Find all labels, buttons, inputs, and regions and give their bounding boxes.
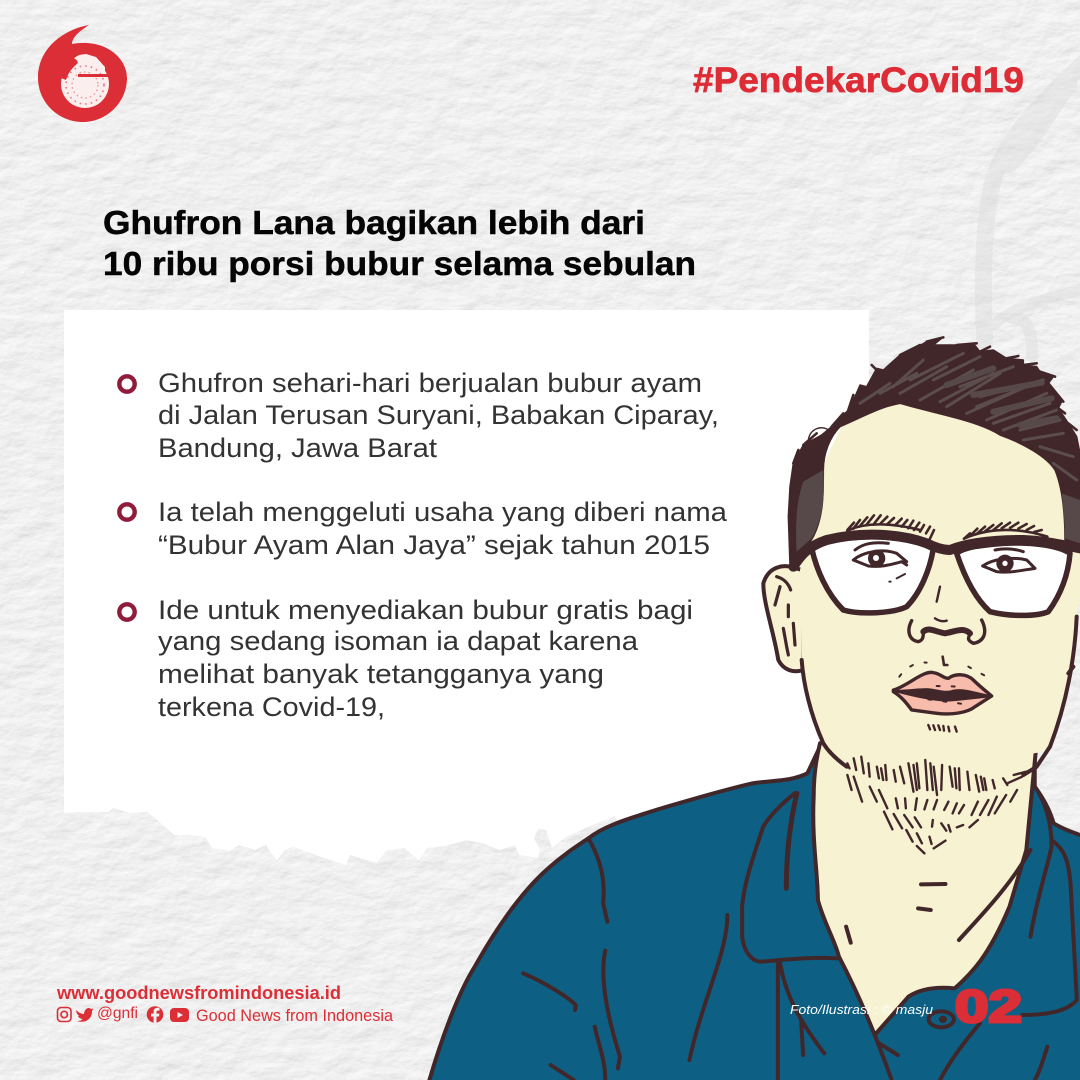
- hair: [788, 338, 1080, 565]
- ear: [763, 566, 803, 671]
- handle: @gnfi: [97, 1005, 138, 1022]
- bullet 3: yang sedang isoman ia dapat karena: [158, 626, 638, 656]
- icon: twitter: [76, 1008, 94, 1022]
- footer contacts: [56, 982, 394, 1025]
- photo credit: Foto/Ilustrasi : © masju: [790, 1002, 933, 1017]
- decorative plant watermark: [983, 62, 1080, 356]
- page name: Good News from Indonesia: [196, 1006, 394, 1025]
- eyes: [853, 543, 907, 566]
- title: 10 ribu porsi bubur selama sebulan: [103, 246, 696, 283]
- nose: [909, 587, 985, 643]
- face skin: [800, 390, 1080, 759]
- head: [763, 337, 1080, 775]
- bullet 3: melihat banyak tetangganya yang: [158, 659, 604, 689]
- icon: instagram: [58, 1008, 71, 1022]
- bullet 1: [119, 368, 719, 463]
- bullet 1: Bandung, Jawa Barat: [158, 433, 438, 463]
- panel: white torn paper: [64, 310, 869, 865]
- title: [103, 205, 696, 283]
- neck skin: [813, 737, 1036, 1035]
- title: Ghufron Lana bagikan lebih dari: [103, 205, 645, 242]
- glasses: [812, 537, 933, 613]
- icon: facebook: [147, 1006, 163, 1023]
- bullet 3: [119, 595, 693, 722]
- bullet 1: di Jalan Terusan Suryani, Babakan Ciparay,: [158, 400, 719, 430]
- icon: youtube: [170, 1008, 189, 1022]
- logo: [38, 25, 127, 122]
- logo: eagle G mark: [61, 54, 109, 108]
- bullet 2: “Bubur Ayam Alan Jaya” sejak tahun 2015: [158, 530, 710, 560]
- shirt: [428, 737, 1080, 1080]
- eyebrows: [847, 515, 1047, 540]
- page number: 02: [955, 981, 1022, 1032]
- bullet 3: terkena Covid-19,: [158, 692, 385, 722]
- hair shading: [796, 470, 824, 552]
- bullet 2: [119, 497, 727, 560]
- website url: www.goodnewsfromindonesia.id: [56, 982, 341, 1003]
- portrait illustration: [428, 337, 1080, 1080]
- bullet list: [119, 368, 727, 722]
- bullet 2: Ia telah menggeluti usaha yang diberi nama: [158, 497, 727, 527]
- hashtag: #PendekarCovid19: [693, 61, 1024, 100]
- bullet 3: Ide untuk menyediakan bubur gratis bagi: [158, 595, 693, 625]
- bullet 1: Ghufron sehari-hari berjualan bubur ayam: [158, 368, 702, 398]
- mouth: [893, 657, 992, 732]
- stubble: [847, 757, 1026, 853]
- hair spikes: [793, 337, 1077, 463]
